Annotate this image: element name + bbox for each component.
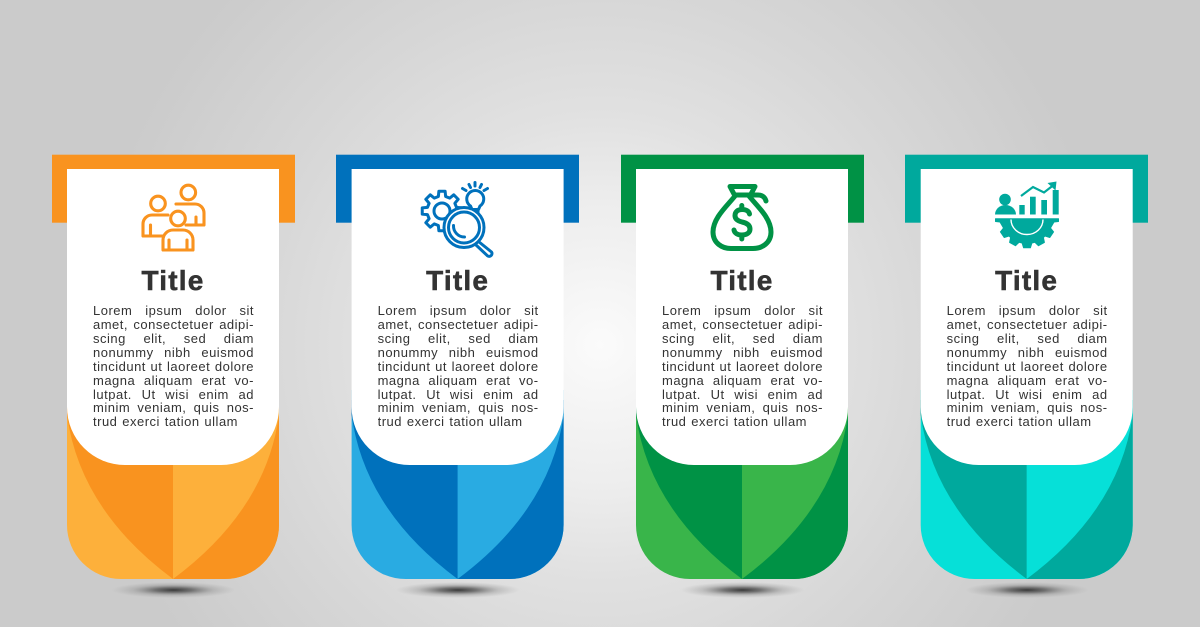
icon: people xyxy=(143,185,204,250)
heading: title 2: Title xyxy=(426,265,489,296)
heading: title 3: Title xyxy=(710,265,774,296)
heading: title 1: Title xyxy=(141,265,205,296)
icon: person, growth chart and gear xyxy=(995,182,1059,248)
text block: description 4 xyxy=(947,304,1108,429)
text block: description 3 xyxy=(662,304,823,429)
heading: title 4: Title xyxy=(995,265,1058,296)
icon: gear, magnifier and light bulb xyxy=(422,182,492,256)
text block: description 2 xyxy=(378,304,539,429)
text block: description 1 xyxy=(93,304,254,429)
panel: card 1 orange xyxy=(52,154,295,597)
panel: card 4 teal xyxy=(905,154,1148,597)
icon: money bag xyxy=(713,186,771,248)
panel: card 3 green xyxy=(621,154,864,597)
panel: card 2 blue xyxy=(336,154,579,597)
